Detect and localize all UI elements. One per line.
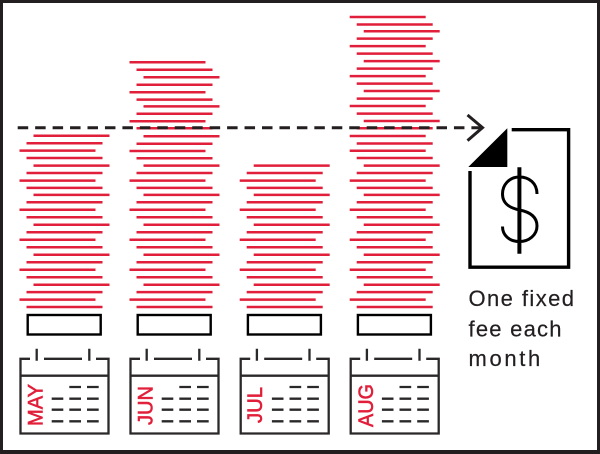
stacked lines: May usage	[20, 136, 110, 307]
calendar: August: AUG	[355, 384, 378, 427]
stacked lines: June usage	[130, 62, 220, 307]
calendar: August	[351, 349, 439, 434]
calendar: June	[130, 349, 218, 434]
text: one fixed fee each month: month	[468, 346, 540, 371]
calendar: June: JUN	[134, 386, 157, 425]
base bar: July	[248, 315, 321, 334]
base bar: August	[358, 315, 431, 334]
base bar: May	[28, 315, 101, 334]
calendar: May	[20, 349, 108, 434]
text: one fixed fee each month: fee each	[468, 316, 562, 342]
icon: bill document with dollar sign	[468, 128, 569, 267]
text: one fixed fee each month	[468, 286, 574, 371]
calendar: July: JUL	[244, 387, 267, 423]
calendar: May: MAY	[23, 384, 47, 426]
stacked lines: July usage	[240, 166, 330, 307]
base bar: June	[138, 315, 211, 334]
text: one fixed fee each month: One fixed	[468, 286, 574, 311]
stacked lines: August usage	[350, 17, 440, 307]
arrow: dashed fixed-fee level line	[18, 115, 482, 141]
calendar: July	[241, 349, 329, 434]
